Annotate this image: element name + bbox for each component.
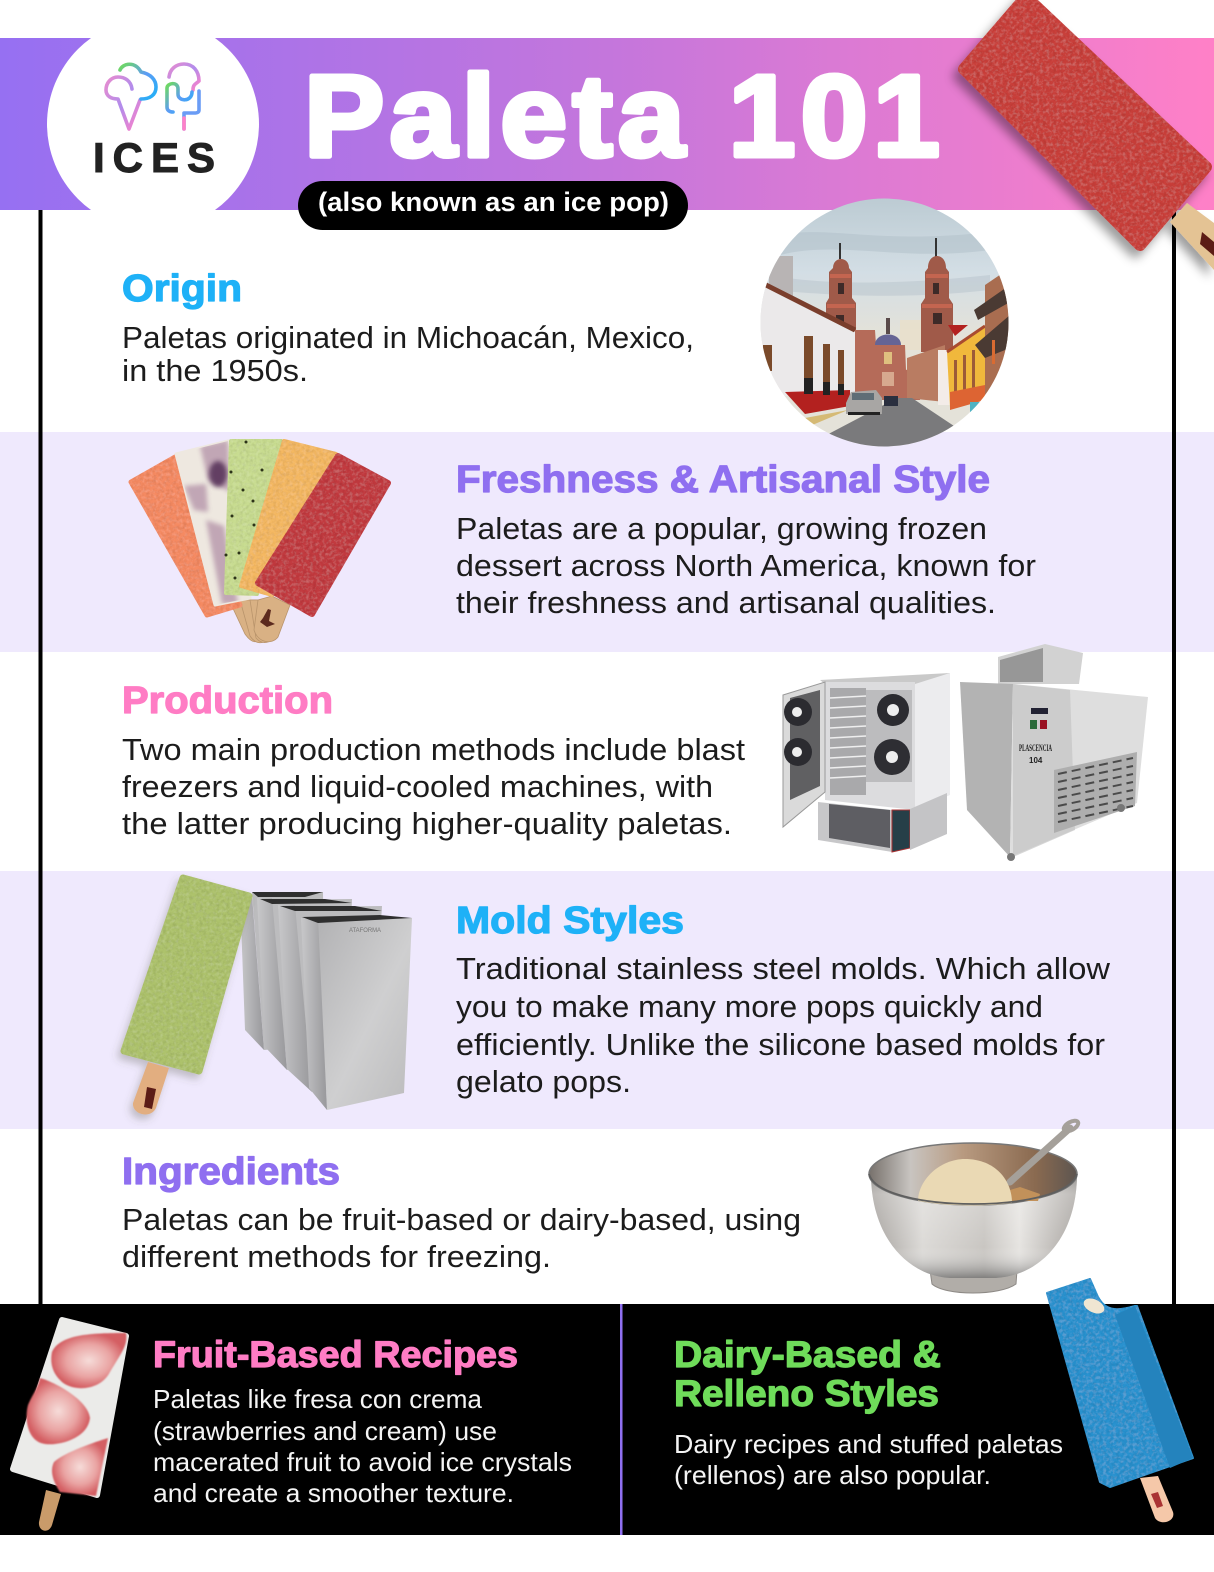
bottom panel <box>0 1279 1214 1535</box>
body: Two main production methods include blast <box>122 732 745 767</box>
icon: fan of five paletas <box>131 440 388 643</box>
stick <box>39 1490 61 1531</box>
section band: freshness <box>0 432 1214 652</box>
front face <box>1010 684 1148 857</box>
strawberry slices <box>51 1333 126 1388</box>
icon: liquid-cooled machine: 104 <box>1029 756 1043 765</box>
heading: Mold Styles <box>456 900 684 942</box>
logo wordmark: ICES <box>93 134 215 181</box>
heading: Ingredients <box>122 1151 340 1193</box>
text: production <box>122 680 745 841</box>
fans <box>784 694 910 775</box>
sticks <box>229 596 290 643</box>
body: efficiently. Unlike the silicone based molds for <box>456 1027 1105 1062</box>
heading <box>674 1334 941 1414</box>
logo badge <box>47 38 259 210</box>
bowl body <box>871 1176 1077 1278</box>
door <box>783 682 825 827</box>
body <box>153 1384 572 1508</box>
orange pop <box>131 457 240 615</box>
body: Paletas originated in Michoacán, Mexico, <box>122 320 694 355</box>
text: origin <box>122 268 694 388</box>
body <box>456 951 1111 1099</box>
road <box>830 398 954 446</box>
bowl foot <box>930 1270 1017 1293</box>
right street buildings <box>907 345 945 402</box>
blue body <box>1047 1279 1193 1487</box>
right frame line <box>1172 210 1176 1305</box>
body: freezers and liquid-cooled machines, with <box>122 769 713 804</box>
icon: stainless steel molds <box>240 892 412 1110</box>
nuts <box>1010 1187 1040 1201</box>
icon: stainless steel molds: ATAFORMA <box>349 928 381 934</box>
base <box>818 802 892 852</box>
fruit-based column <box>153 1334 572 1508</box>
subtitle pill <box>298 181 688 230</box>
left frame line <box>38 210 42 1305</box>
kiwi pop <box>226 441 281 594</box>
filling <box>1081 1295 1107 1317</box>
body <box>122 732 745 841</box>
icon: strawberries and cream paleta <box>13 1320 126 1531</box>
body: dessert across North America, known for <box>456 548 1036 583</box>
body: different methods for freezing. <box>122 1239 551 1274</box>
left face <box>960 682 1013 857</box>
icon: ice cream cone <box>106 64 156 129</box>
icon: ice pop <box>167 64 199 129</box>
mango pop <box>241 441 336 595</box>
text: ingredients <box>122 1151 801 1274</box>
spoon <box>1010 1119 1080 1182</box>
marbled pop <box>176 440 250 605</box>
body: macerated fruit to avoid ice crystals <box>153 1447 572 1477</box>
body: their freshness and artisanal qualities. <box>456 585 996 620</box>
body: and create a smoother texture. <box>153 1478 514 1508</box>
vent panel <box>1054 752 1137 833</box>
icon: steel bowl with ice cream <box>869 1119 1080 1293</box>
heading: Relleno Styles <box>674 1373 939 1414</box>
section band: mold styles <box>0 871 1214 1129</box>
icon: blue stuffed paleta <box>1047 1279 1193 1522</box>
heading: Origin <box>122 268 242 310</box>
icon: blast freezer <box>783 673 950 852</box>
heading: Production <box>122 680 333 722</box>
scoop of ice cream <box>918 1159 1012 1205</box>
cars <box>846 390 882 414</box>
black background <box>0 1304 1214 1535</box>
heading: Dairy-Based & <box>674 1334 941 1375</box>
body <box>122 1202 801 1274</box>
body: (strawberries and cream) use <box>153 1416 497 1446</box>
body <box>122 320 694 388</box>
control panel <box>1031 708 1048 714</box>
bowl inside <box>869 1143 1077 1205</box>
icon: liquid-cooled machine <box>960 644 1148 861</box>
bowl rim front <box>869 1174 1077 1204</box>
dairy-based column <box>674 1334 1063 1490</box>
strawberry pop <box>258 456 388 614</box>
body: Dairy recipes and stuffed paletas <box>674 1429 1063 1459</box>
cream body <box>13 1320 126 1495</box>
body: the latter producing higher-quality paletas. <box>122 806 732 841</box>
title: Paleta 101 <box>304 51 945 181</box>
body: (rellenos) are also popular. <box>674 1460 991 1490</box>
subtitle pill: (also known as an ice pop) <box>318 187 669 217</box>
body: Paletas like fresa con crema <box>153 1384 483 1414</box>
center divider <box>620 1304 622 1535</box>
icon: green paleta <box>124 878 249 1114</box>
towers <box>826 238 953 352</box>
stick <box>1140 1476 1173 1522</box>
heading: Freshness & Artisanal Style <box>456 459 990 501</box>
gradient banner <box>0 38 1214 210</box>
brand plate: PLASCENCIA <box>1019 743 1052 753</box>
body: gelato pops. <box>456 1064 631 1099</box>
header <box>0 18 1214 230</box>
body: in the 1950s. <box>122 353 308 388</box>
body: Traditional stainless steel molds. Which allow <box>456 951 1111 986</box>
body: Paletas can be fruit-based or dairy-based, using <box>122 1202 801 1237</box>
photo: Morelia street and cathedral <box>760 198 1010 450</box>
body <box>456 511 1036 620</box>
church and dome <box>855 330 920 400</box>
body: Paletas are a popular, growing frozen <box>456 511 987 546</box>
icon: red paleta top right <box>964 0 1214 270</box>
body <box>674 1429 1063 1490</box>
text: mold styles <box>456 900 1111 1099</box>
top tank <box>998 644 1083 684</box>
cabinet side <box>915 673 950 810</box>
side facet <box>1115 1306 1193 1468</box>
heading: Fruit-Based Recipes <box>153 1334 518 1375</box>
white colonial building <box>760 283 855 396</box>
body: you to make many more pops quickly and <box>456 989 1043 1024</box>
text: freshness <box>456 459 1036 620</box>
interior <box>825 682 915 810</box>
